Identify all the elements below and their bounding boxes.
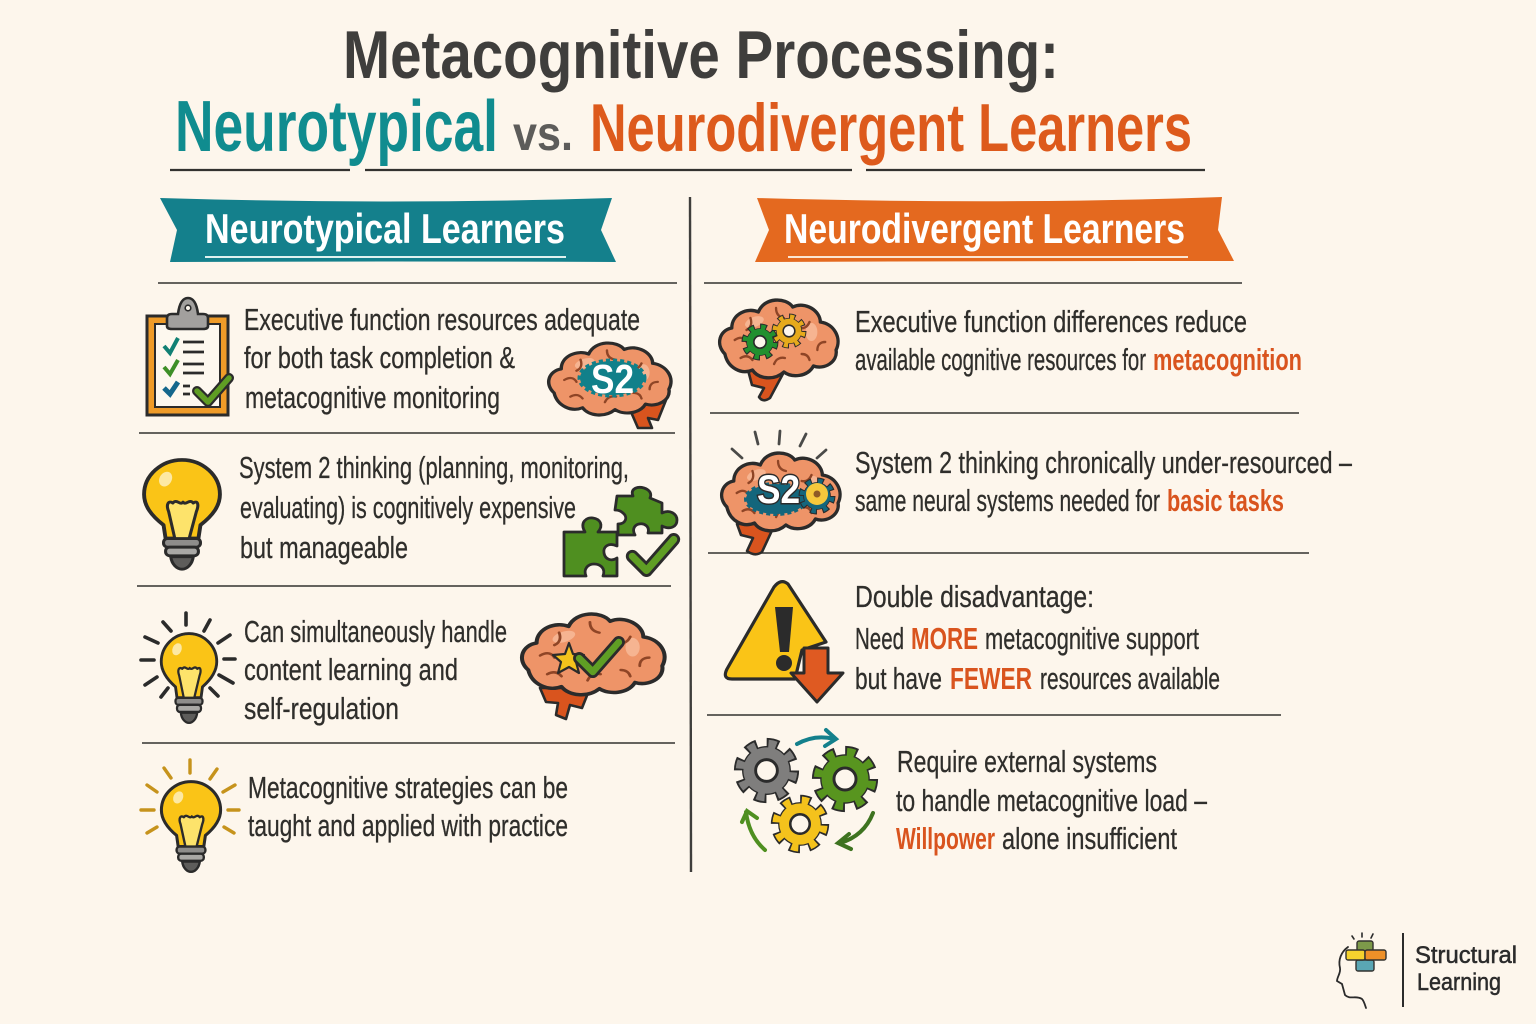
icon: clipboard [147,298,229,415]
icon: glowing light bulb [141,760,239,872]
text: evaluating) is cognitively expensive [240,490,576,525]
icon: brain with S2 [549,343,671,428]
icon: brain with S2 under strain [722,431,840,554]
panel: neurodivergent row 1 [720,300,1302,400]
text: same neural systems needed for [855,483,1160,518]
text: metacognition [1153,342,1302,377]
text [244,614,507,726]
banner: neurotypical learners [160,198,616,262]
icon: light bulb [144,460,220,569]
icon: brain with S2: S2 [591,356,634,402]
text: Executive function resources adequate [244,302,640,337]
text [855,304,1302,377]
panel: neurotypical row 3 [141,613,665,726]
icon: glowing light bulb [141,613,235,723]
text: for both task completion & [244,340,515,375]
text: resources available [1040,661,1220,696]
text: Need [855,621,904,656]
text [855,445,1353,518]
banner: neurotypical learners: Neurotypical Learners [205,205,565,252]
title: Metacognitive Processing: [343,17,1059,93]
logo: Structural Learning: Learning [1417,969,1501,996]
text: Metacognitive strategies can be [248,770,568,805]
text: but have [855,661,942,696]
text: Executive function differences reduce [855,304,1247,339]
text: Can simultaneously handle [244,614,507,649]
text [239,450,629,565]
text: metacognitive support [985,621,1199,656]
text: alone insufficient [1002,821,1177,856]
icon: gears with cycle arrows [740,730,873,850]
text: content learning and [244,652,458,687]
text: taught and applied with practice [248,808,568,843]
text: metacognitive monitoring [245,380,500,415]
text [896,744,1208,856]
text: to handle metacognitive load – [896,783,1208,818]
banner: neurodivergent learners [755,197,1234,262]
logo: Structural Learning: Structural [1415,942,1517,969]
title: Neurotypical [175,87,498,167]
panel: neurotypical row 2 [144,450,677,576]
icon: brain with check and star [522,614,665,719]
banner: neurodivergent learners: Neurodivergent Learners [784,205,1185,252]
panel: neurodivergent row 3 [725,579,1220,702]
icon: puzzle pieces [564,487,677,576]
panel: neurodivergent row 4 [740,730,1208,856]
text: System 2 thinking (planning, monitoring, [239,450,629,485]
title [170,17,1205,170]
text: Require external systems [897,744,1157,779]
text: available cognitive resources for [855,342,1146,377]
icon: brain with S2 under strain: S2 [757,468,800,512]
divider [690,197,691,872]
panel: neurotypical row 1 [147,298,671,428]
text: but manageable [240,530,408,565]
panel: neurotypical row 4 [141,760,568,872]
text: FEWER [950,661,1032,696]
text: basic tasks [1167,483,1284,518]
title: vs. [513,108,573,161]
text [248,770,568,843]
text: System 2 thinking chronically under-resourced – [855,445,1353,480]
text [244,302,640,415]
icon: brain with gears [720,300,838,400]
panel: neurodivergent row 2 [722,431,1353,554]
icon: warning triangle with down arrow [725,582,843,702]
title: Neurodivergent Learners [590,90,1192,166]
text: Double disadvantage: [855,579,1094,614]
text: self-regulation [244,691,399,726]
text [855,579,1220,696]
logo: Structural Learning [1337,933,1517,1008]
text: Willpower [896,821,995,856]
text: MORE [911,621,978,656]
